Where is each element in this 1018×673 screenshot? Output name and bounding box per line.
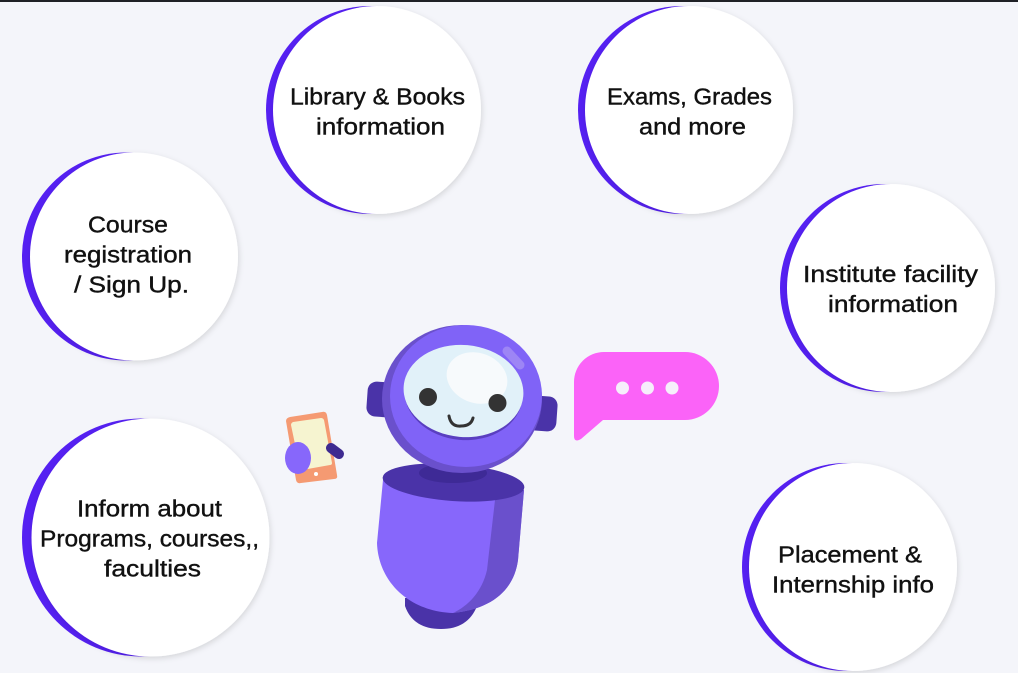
text: exams and grades: and more — [639, 114, 746, 140]
text: course registration: / Sign Up. — [74, 272, 189, 298]
eyes — [419, 388, 506, 412]
robot head — [382, 325, 542, 473]
panel: programs and courses — [22, 418, 270, 656]
bubble dots — [616, 382, 678, 394]
robot base — [405, 598, 477, 629]
text: institute facility: Institute facility — [803, 261, 979, 287]
panel: exams and grades — [578, 6, 793, 214]
robot visor — [400, 340, 527, 442]
icon: robot — [366, 325, 558, 629]
text: exams and grades: Exams, Grades — [607, 84, 772, 110]
panel: library and books — [266, 6, 481, 214]
smile — [449, 416, 473, 426]
panel: placement and internship — [742, 463, 957, 671]
robot body shade — [453, 490, 524, 613]
robot body — [377, 480, 524, 613]
panel: course registration — [22, 152, 238, 360]
text: course registration: Course — [88, 212, 168, 238]
text: course registration: registration — [64, 242, 192, 268]
text: library and books: Library & Books — [290, 84, 465, 110]
icon: phone in hand — [285, 412, 339, 483]
text: placement and internship: Placement & — [778, 542, 922, 568]
text: library and books: information — [316, 114, 445, 140]
phone body — [286, 412, 337, 483]
text: programs and courses: faculties — [104, 556, 201, 582]
robot ears — [366, 381, 558, 432]
text: programs and courses: Inform about — [77, 496, 223, 522]
robot head highlight — [390, 325, 542, 467]
visor glare — [439, 344, 515, 412]
finger — [331, 448, 339, 454]
text: programs and courses: Programs, courses,, — [40, 526, 259, 552]
robot body top — [381, 459, 526, 506]
phone home button — [314, 472, 318, 476]
hand — [285, 442, 311, 474]
text: placement and internship: Internship info — [772, 572, 934, 598]
icon: speech bubble — [574, 352, 719, 440]
text: institute facility: information — [828, 291, 958, 317]
phone screen — [291, 418, 332, 470]
panel: institute facility — [780, 184, 995, 392]
robot neck shadow — [419, 463, 487, 483]
head glare — [507, 351, 520, 365]
robot face — [401, 343, 526, 445]
